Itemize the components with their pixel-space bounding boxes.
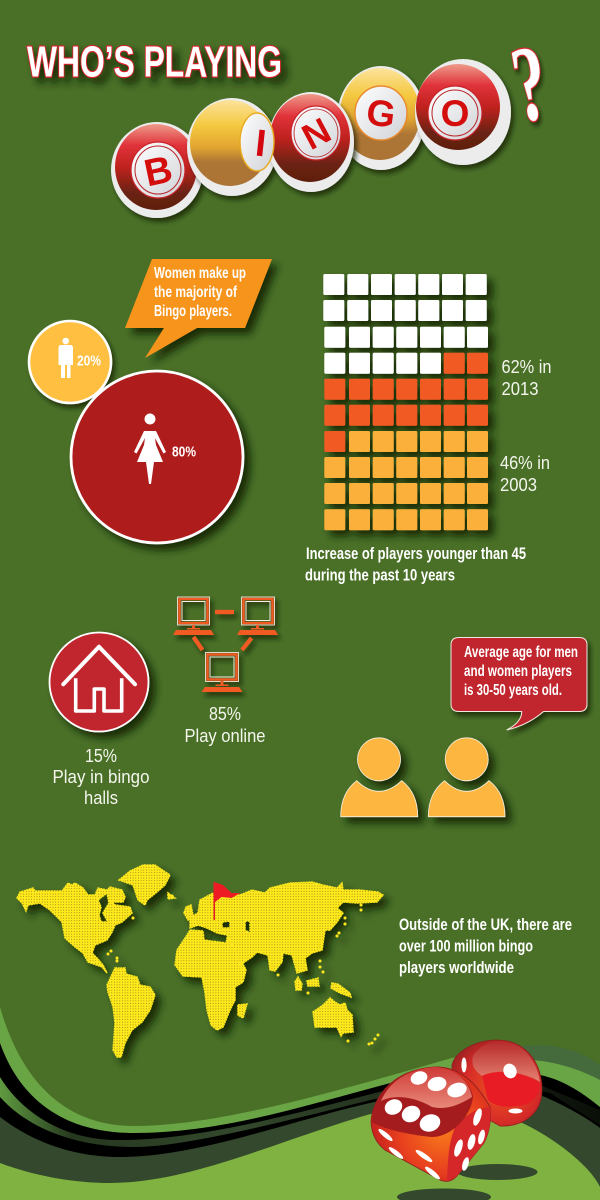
ball N — [268, 92, 354, 192]
chart: unit grid of players younger than 45 — [323, 274, 488, 530]
ball B — [111, 122, 203, 218]
computer left — [173, 597, 214, 635]
ball O: O — [441, 93, 469, 134]
callout: women majority: Bingo players. — [154, 303, 232, 320]
top face pips — [382, 1069, 469, 1135]
question mark: ? — [504, 23, 556, 146]
bingo balls — [111, 59, 511, 218]
madagascar — [238, 1004, 247, 1018]
small island dots — [106, 894, 380, 1046]
computer right — [237, 597, 278, 635]
label: 15% play in bingo halls — [52, 745, 150, 808]
panel: women 80%: 80% — [172, 444, 196, 460]
world map — [17, 865, 383, 1057]
text: worldwide players: players worldwide — [399, 958, 514, 977]
dice shadows — [397, 1164, 538, 1200]
callout: women majority — [125, 259, 272, 358]
chart caption: Increase of players younger than 45 — [306, 544, 526, 563]
text: worldwide players — [399, 915, 572, 977]
ball I — [187, 98, 277, 196]
ball N: N — [295, 109, 337, 158]
label: 85% play online: 85% — [209, 703, 241, 724]
top face highlight — [381, 1067, 472, 1108]
icon: networked computers — [173, 597, 278, 692]
label: 15% play in bingo halls: halls — [84, 787, 118, 808]
side face pips — [377, 1107, 486, 1181]
title: WHO’S PLAYING — [27, 38, 282, 86]
text: worldwide players: over 100 million bingo — [399, 936, 533, 956]
label: 46% in 2003: 46% in — [500, 452, 550, 473]
ball G: G — [364, 91, 398, 136]
icon: rear die — [452, 1040, 542, 1126]
icon: front die — [371, 1067, 491, 1181]
ball G — [337, 66, 425, 170]
panel: women 80% — [71, 371, 243, 543]
letter disc I: I — [253, 123, 268, 165]
iceland — [168, 893, 175, 899]
label: 85% play online — [184, 703, 266, 746]
icon: two people — [341, 738, 505, 817]
icon: woman — [134, 414, 166, 484]
icon: red flag — [214, 882, 240, 920]
person left — [341, 738, 418, 817]
person right — [428, 738, 505, 817]
panel: men 20%: 20% — [77, 354, 101, 370]
label: 46% in 2003: 2003 — [500, 474, 537, 495]
chart caption: during the past 10 years — [305, 566, 455, 584]
callout: women majority: the majority of — [154, 284, 238, 301]
right face — [447, 1107, 491, 1181]
ball O — [415, 59, 511, 165]
callout: women majority: Women make up — [154, 265, 246, 282]
north america — [17, 883, 132, 973]
africa — [175, 930, 246, 1030]
connectors — [194, 612, 252, 650]
chart caption — [305, 544, 526, 584]
label: 62% in 2013: 2013 — [502, 378, 538, 399]
callout: average age — [451, 638, 587, 730]
label: 62% in 2013: 62% in — [502, 356, 552, 377]
ball B: B — [141, 149, 176, 195]
letter disc I — [240, 113, 274, 171]
computer bottom — [202, 652, 242, 692]
icon: house — [50, 632, 148, 732]
label: 85% play online: Play online — [184, 725, 266, 746]
south america — [107, 968, 155, 1057]
scandinavia — [184, 905, 194, 920]
australia — [313, 998, 353, 1036]
icon: man — [58, 338, 73, 378]
bottom swoosh bands — [0, 1007, 600, 1200]
label: 15% play in bingo halls: 15% — [85, 745, 117, 766]
label: 62% in 2013 — [502, 356, 552, 399]
greenland — [119, 865, 170, 905]
label: 15% play in bingo halls: Play in bingo — [52, 766, 150, 787]
top face — [372, 1067, 473, 1137]
eurasia — [190, 882, 383, 973]
panel: men 20% — [29, 321, 111, 403]
label: 46% in 2003 — [500, 452, 550, 495]
callout: average age: is 30-50 years old. — [464, 682, 562, 699]
indonesia islands — [295, 977, 351, 997]
